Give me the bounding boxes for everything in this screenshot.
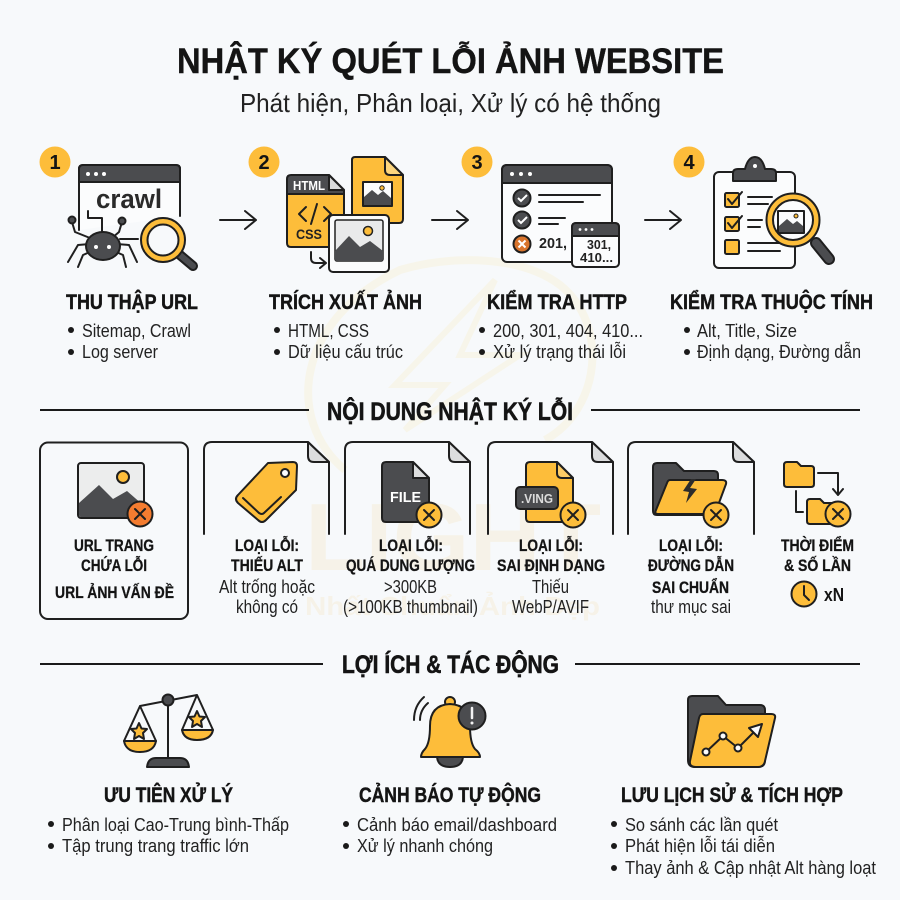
bullets: Xử lý nhanh chóng	[357, 835, 493, 856]
benefit: ưu tiên xử lý	[48, 694, 289, 856]
panel: thiếu alt: Alt trống hoặc	[219, 576, 315, 597]
bullets	[611, 814, 876, 878]
panel: URL trang chứa lỗi: URL ẢNH VẤN ĐỀ	[55, 583, 174, 602]
heading: TRÍCH XUẤT ẢNH	[269, 291, 422, 314]
icon: code file and images	[287, 157, 403, 272]
heading: KIỂM TRA THUỘC TÍNH	[670, 290, 873, 314]
icon: status window: 301,	[587, 237, 611, 252]
benefit: lưu lịch sử và tích hợp: LƯU LỊCH SỬ & TÍCH HỢP	[621, 783, 843, 807]
panel: thiếu alt	[204, 442, 329, 617]
bullets: 200, 301, 404, 410...	[493, 320, 643, 341]
panel: thời điểm và số lần: xN	[824, 585, 844, 605]
heading: KIỂM TRA HTTP	[487, 291, 627, 314]
panel: thời điểm và số lần: & SỐ LẦN	[784, 555, 851, 575]
bullets	[479, 320, 643, 362]
bullets	[274, 320, 403, 362]
section heading: lợi ích và tác động: LỢI ÍCH & TÁC ĐỘNG	[342, 649, 559, 679]
arrow 3 to 4	[645, 211, 681, 229]
icon: heavy file: FILE	[390, 489, 421, 506]
icon: wrong format file	[516, 462, 586, 528]
arrow 1 to 2	[220, 211, 256, 229]
panel: quá dung lượng	[343, 442, 478, 617]
badge 3	[462, 146, 492, 178]
bullets	[343, 814, 557, 856]
bullets: Sitemap, Crawl	[82, 320, 191, 341]
badge 4	[674, 146, 704, 178]
watermark logo: LIGHT	[305, 484, 601, 591]
icon: broken image	[78, 463, 152, 526]
benefit: cảnh báo tự động: CẢNH BÁO TỰ ĐỘNG	[359, 783, 541, 807]
panel: đường dẫn sai chuẩn: thư mục sai	[651, 596, 731, 617]
title: NHẬT KÝ QUÉT LỖI ẢNH WEBSITE	[177, 41, 724, 81]
icon: heavy file	[382, 462, 442, 528]
icon: status window: 410...	[580, 250, 613, 265]
icon: tag	[236, 462, 297, 522]
bullets: So sánh các lần quét	[625, 814, 778, 835]
subtitle: Phát hiện, Phân loại, Xử lý có hệ thống	[240, 88, 661, 118]
panel: đường dẫn sai chuẩn	[628, 442, 754, 617]
bullets: Dữ liệu cấu trúc	[288, 341, 403, 362]
panel: thiếu alt: THIẾU ALT	[231, 556, 303, 575]
watermark logo: Nhất Chuẩn Ảnh Đẹp	[305, 591, 600, 621]
bullets	[684, 320, 861, 362]
step 3: kiểm tra HTTP	[462, 146, 643, 362]
bullets: Thay ảnh & Cập nhật Alt hàng loạt	[625, 857, 876, 878]
icon: bell	[414, 697, 486, 767]
icon: balance scale	[124, 694, 213, 767]
bullets: HTML, CSS	[288, 320, 369, 341]
panel: thời điểm và số lần	[781, 462, 854, 606]
panel: sai định dạng: LOẠI LỖI:	[519, 536, 583, 555]
benefit: lưu lịch sử và tích hợp	[611, 696, 876, 878]
badge 1: 1	[49, 152, 61, 174]
panel: đường dẫn sai chuẩn: LOẠI LỖI:	[659, 536, 723, 555]
bullets	[68, 320, 191, 362]
benefit: ưu tiên xử lý: ƯU TIÊN XỬ LÝ	[104, 783, 233, 807]
badge 2: 2	[258, 152, 270, 174]
icon: clock	[792, 582, 816, 606]
panel: sai định dạng: SAI ĐỊNH DẠNG	[497, 556, 605, 575]
watermark logo	[305, 260, 601, 621]
badge 2	[248, 146, 280, 178]
icon: folder with trend	[688, 696, 775, 767]
icon: status window: 201,	[539, 235, 567, 252]
bullets: Log server	[82, 341, 158, 362]
icon: broken folder	[653, 463, 728, 528]
bullets: Phân loại Cao-Trung bình-Thấp	[62, 814, 289, 835]
bullets: Cảnh báo email/dashboard	[357, 814, 557, 835]
arrow 2 to 3	[432, 211, 468, 229]
icon: moving folders	[784, 462, 850, 526]
step 2: trích xuất ảnh	[248, 146, 422, 362]
icon: crawl window with spider and magnifier	[68, 165, 193, 267]
icon: status window	[502, 165, 619, 267]
panel: thiếu alt: LOẠI LỖI:	[235, 536, 299, 555]
icon: code file and images: CSS	[296, 226, 322, 242]
panel: quá dung lượng: (>100KB thumbnail)	[343, 596, 478, 617]
heading: THU THẬP URL	[66, 290, 198, 314]
panel: sai định dạng	[488, 442, 613, 617]
icon: crawl window with spider and magnifier: crawl	[96, 184, 162, 214]
panel: quá dung lượng: QUÁ DUNG LƯỢNG	[346, 556, 475, 575]
panel: quá dung lượng: LOẠI LỖI:	[379, 536, 443, 555]
icon: wrong format file: .VING	[521, 491, 553, 506]
panel: quá dung lượng: >300KB	[384, 576, 437, 597]
step 1: thu thập URL	[40, 146, 198, 362]
panel: sai định dạng: Thiếu	[532, 576, 569, 597]
icon: clipboard with magnifier	[714, 157, 829, 268]
panel: URL trang chứa lỗi: URL TRANG	[74, 536, 154, 555]
bullets: Tập trung trang traffic lớn	[62, 835, 249, 856]
panel: đường dẫn sai chuẩn: SAI CHUẨN	[652, 578, 729, 597]
benefit: cảnh báo tự động	[343, 697, 557, 856]
panel: đường dẫn sai chuẩn: ĐƯỜNG DẪN	[648, 556, 734, 575]
bullets: Phát hiện lỗi tái diễn	[625, 835, 775, 856]
bullets	[48, 814, 289, 856]
step 4: kiểm tra thuộc tính	[670, 146, 873, 362]
panel: thiếu alt: không có	[236, 596, 298, 617]
icon: code file and images: HTML	[293, 178, 325, 193]
panel: URL trang chứa lỗi	[40, 442, 188, 619]
bullets: Xử lý trạng thái lỗi	[493, 341, 626, 362]
panel: thời điểm và số lần: THỜI ĐIỂM	[781, 536, 854, 555]
badge 1	[40, 146, 70, 178]
section heading: nội dung nhật ký lỗi: NỘI DUNG NHẬT KÝ LỖI	[327, 396, 573, 426]
panel: URL trang chứa lỗi: CHỨA LỖI	[81, 556, 147, 575]
badge 3: 3	[471, 152, 483, 174]
bullets: Định dạng, Đường dẫn	[697, 341, 861, 362]
badge 4: 4	[683, 152, 695, 174]
bullets: Alt, Title, Size	[697, 320, 797, 341]
panel: sai định dạng: WebP/AVIF	[512, 596, 589, 617]
